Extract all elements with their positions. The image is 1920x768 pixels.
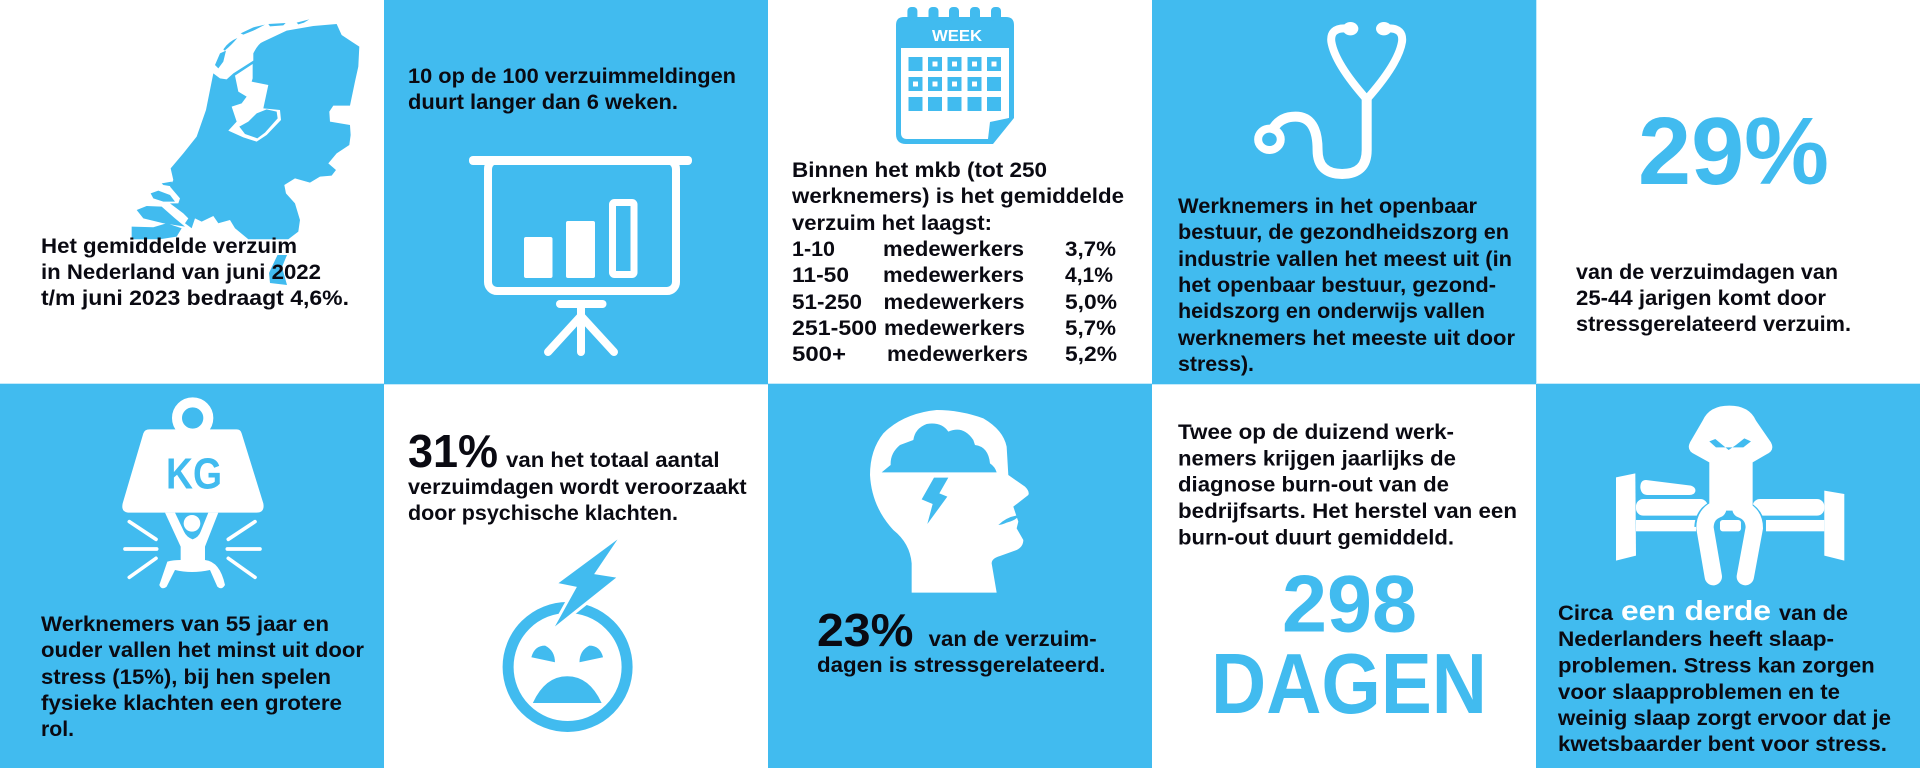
panel: 29 procent	[1576, 98, 1851, 336]
text: slaapproblemen: een derde	[1621, 595, 1771, 626]
table: verzuim per bedrijfsgrootte: 3,7%	[1065, 237, 1116, 261]
text: slaapproblemen: Circa	[1558, 601, 1614, 625]
text: slaapproblemen: problemen. Stress kan zorgen	[1558, 654, 1875, 678]
icon: person sitting on bed	[1616, 406, 1844, 577]
table: verzuim per bedrijfsgrootte: medewerkers	[884, 316, 1025, 340]
big number: 298 dagen: DAGEN	[1211, 637, 1487, 732]
big number: 298 dagen: 298	[1282, 560, 1417, 650]
text: 55 jaar en ouder: ouder vallen het minst uit door	[41, 638, 365, 662]
text: slaapproblemen	[1557, 595, 1891, 756]
icon: week calendar: WEEK	[932, 28, 982, 45]
icon: angry face with lightning	[508, 533, 627, 726]
text: stressgerelateerd	[817, 604, 1106, 677]
big number: 298 dagen	[1211, 560, 1487, 732]
text: sectoren: stress).	[1178, 352, 1254, 376]
table: verzuim per bedrijfsgrootte: 4,1%	[1065, 263, 1113, 287]
text: mkb intro	[791, 158, 1124, 235]
text: 55 jaar en ouder: Werknemers van 55 jaar en	[41, 612, 329, 636]
text: burn-out: burn-out duurt gemiddeld.	[1178, 526, 1454, 550]
text: burn-out: bedrijfsarts. Het herstel van een	[1178, 499, 1517, 523]
text: psychische klachten: van het totaal aantal	[506, 448, 720, 472]
text: 25-44 jarigen: van de verzuimdagen van	[1576, 260, 1838, 284]
text: 55 jaar en ouder: fysieke klachten een grotere	[41, 691, 342, 715]
text: mkb intro: verzuim het laagst:	[792, 211, 992, 235]
text: burn-out	[1178, 420, 1517, 550]
text: slaapproblemen: van de	[1779, 601, 1848, 625]
text: psychische klachten: door psychische klachten.	[408, 501, 678, 525]
text: 25-44 jarigen: 25-44 jarigen komt door	[1576, 286, 1827, 310]
table: verzuim per bedrijfsgrootte: medewerkers	[887, 342, 1028, 366]
text: 55 jaar en ouder: rol.	[41, 717, 74, 741]
text: sectoren: heidszorg en onderwijs vallen	[1178, 299, 1485, 323]
text: gemiddeld verzuim: Het gemiddelde verzuim	[41, 234, 297, 258]
text: slaapproblemen: weinig slaap zorgt ervoor dat je	[1557, 706, 1891, 730]
text: stressgerelateerd: dagen is stressgerelateerd.	[817, 653, 1106, 677]
text: 10 op de 100: 10 op de 100 verzuimmeldingen	[408, 64, 736, 88]
text: gemiddeld verzuim: t/m juni 2023 bedraagt 4,6%.	[41, 286, 349, 310]
table: verzuim per bedrijfsgrootte: 11-50	[792, 263, 849, 287]
text: mkb intro: werknemers) is het gemiddelde	[791, 184, 1124, 208]
table: verzuim per bedrijfsgrootte: 51-250	[792, 290, 862, 314]
text: psychische klachten	[408, 425, 747, 525]
text: slaapproblemen: kwetsbaarder bent voor stress.	[1558, 732, 1887, 756]
text: burn-out: Twee op de duizend werk-	[1178, 420, 1454, 444]
text: psychische klachten: verzuimdagen wordt veroorzaakt	[408, 475, 747, 499]
panel: gemiddeld verzuim Nederland	[41, 19, 359, 310]
table: verzuim per bedrijfsgrootte: 5,0%	[1065, 290, 1117, 314]
text: burn-out: nemers krijgen jaarlijks de	[1178, 447, 1456, 471]
text: sectoren: werknemers het meeste uit door	[1177, 326, 1516, 350]
text: stressgerelateerd: 23%	[817, 604, 913, 656]
icon: stethoscope	[1258, 22, 1402, 174]
icon: map of the Netherlands	[132, 19, 359, 285]
panel: 31 procent	[408, 425, 747, 726]
table: verzuim per bedrijfsgrootte: medewerkers	[884, 290, 1025, 314]
table: verzuim per bedrijfsgrootte: 500+	[792, 342, 846, 366]
panel: 55 jaar en ouder	[0, 384, 384, 768]
table: verzuim per bedrijfsgrootte: 251-500	[792, 316, 877, 340]
icon: head with storm cloud	[870, 410, 1029, 593]
text: 25-44 jarigen	[1576, 260, 1851, 336]
panel: sectoren	[1152, 0, 1536, 384]
panel: verzuimmeldingen	[384, 0, 768, 384]
table: verzuim per bedrijfsgrootte	[792, 237, 1117, 366]
text: sectoren	[1177, 194, 1516, 376]
text: 55 jaar en ouder	[41, 612, 365, 741]
panel: mkb verzuim	[791, 7, 1124, 366]
text: sectoren: Werknemers in het openbaar	[1178, 194, 1478, 218]
table: verzuim per bedrijfsgrootte: 5,7%	[1065, 316, 1116, 340]
text: 25-44 jarigen: stressgerelateerd verzuim.	[1576, 312, 1851, 336]
icon: presentation board with bars	[469, 156, 692, 352]
text: 55 jaar en ouder: stress (15%), bij hen spelen	[41, 665, 331, 689]
text: gemiddeld verzuim	[41, 234, 349, 310]
text: gemiddeld verzuim: in Nederland van juni 2022	[41, 260, 321, 284]
panel: slaapproblemen	[1536, 384, 1920, 768]
text: 10 op de 100	[408, 64, 736, 114]
table: verzuim per bedrijfsgrootte: medewerkers	[883, 237, 1024, 261]
table: verzuim per bedrijfsgrootte: medewerkers	[883, 263, 1024, 287]
text: sectoren: het openbaar bestuur, gezond-	[1178, 273, 1496, 297]
text: 10 op de 100: duurt langer dan 6 weken.	[408, 90, 678, 114]
text: sectoren: bestuur, de gezondheidszorg en	[1178, 220, 1509, 244]
text: mkb intro: Binnen het mkb (tot 250	[792, 158, 1047, 182]
text: burn-out: diagnose burn-out van de	[1178, 473, 1449, 497]
icon: figure lifting weight	[122, 402, 264, 588]
table: verzuim per bedrijfsgrootte: 5,2%	[1065, 342, 1117, 366]
text: psychische klachten: 31%	[408, 425, 498, 477]
text: slaapproblemen: Nederlanders heeft slaap-	[1558, 627, 1834, 651]
table: verzuim per bedrijfsgrootte: 1-10	[792, 237, 835, 261]
icon: week calendar	[896, 7, 1014, 144]
big number: 29%: 29%	[1638, 98, 1829, 205]
panel: burn-out	[1178, 420, 1517, 732]
text: stressgerelateerd: van de verzuim-	[929, 627, 1097, 651]
text: slaapproblemen: voor slaapproblemen en te	[1558, 680, 1840, 704]
icon: figure lifting weight: KG	[166, 450, 222, 499]
text: sectoren: industrie vallen het meest uit (in	[1178, 247, 1512, 271]
panel: 23 procent	[768, 384, 1152, 768]
